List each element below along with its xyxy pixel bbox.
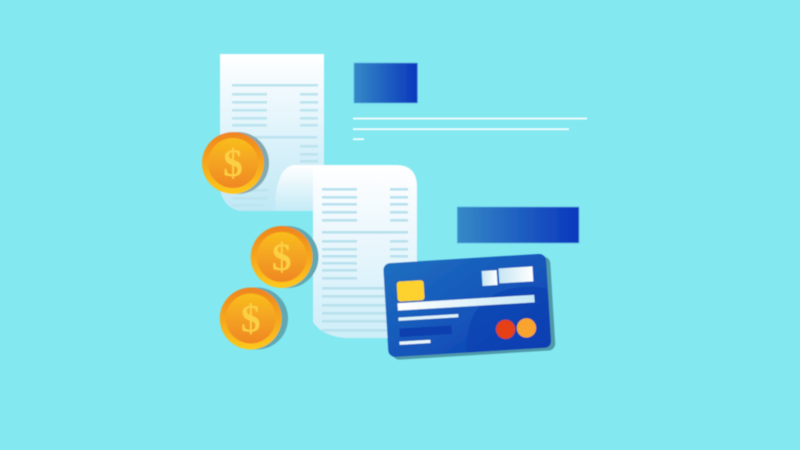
card logo circles [495,319,516,340]
heading placeholder: top blue bar [354,63,418,103]
icon: coin top [202,132,269,194]
card chip [397,280,425,302]
artwork wrapper [202,54,587,360]
heading placeholder: lower blue bar [457,207,579,243]
card signature panels [482,270,498,286]
receipt curl [275,165,330,212]
icon: coin middle: $ [272,236,291,279]
icon: coin top: $ [223,142,243,185]
icon: credit card [383,253,556,360]
receipt body [313,165,417,338]
panel: back receipt [220,54,324,211]
icon: coin bottom: $ [241,298,261,340]
icon: coin bottom [220,288,288,350]
icon: coin middle [251,226,318,288]
panel: front receipt [275,165,417,338]
text lines placeholder [353,118,587,140]
card strip [397,295,535,311]
card text lines [398,314,458,321]
